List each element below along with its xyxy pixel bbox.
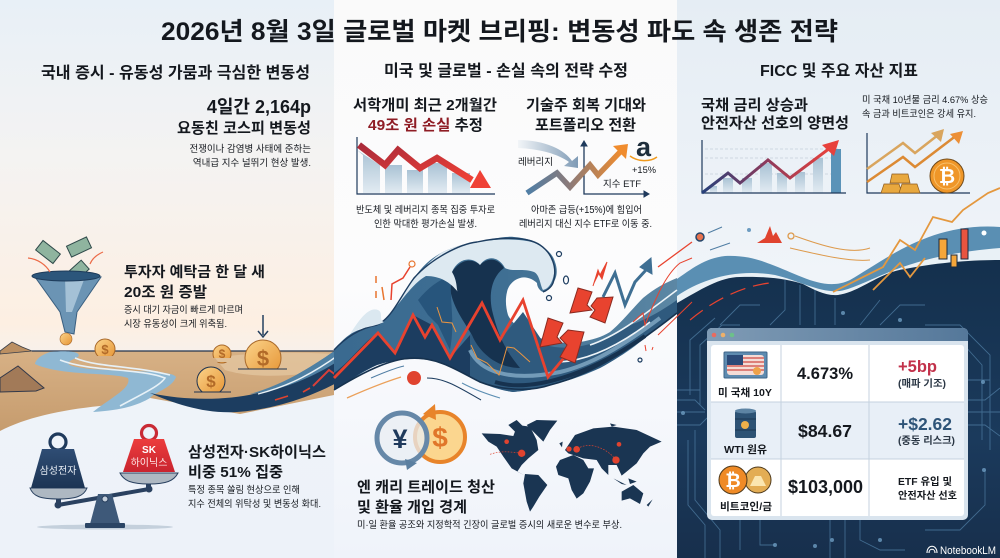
- text block: yen carry trade: 미·일 환율 공조와 지정학적 긴장이 글로벌 증시의 새로운 변수로 부상.: [357, 519, 622, 531]
- chart: falling losses: [357, 137, 495, 194]
- table row: WTI: +$2.62: [898, 414, 952, 434]
- wave navy lower left band: [334, 315, 470, 390]
- table row: WTI: (중동 리스크): [898, 435, 955, 447]
- line: red zigzag: [334, 300, 573, 378]
- line: orange rising: [833, 188, 1000, 292]
- text block: concentration: 삼성전자·SK하이닉스: [188, 444, 326, 461]
- text block: retail losses heading: [353, 97, 497, 134]
- wave dark core: [450, 260, 520, 368]
- illustration: market wave: [334, 237, 677, 392]
- chart: portfolio rotation: [518, 132, 657, 197]
- text block: KOSPI volatility: 전쟁이나 감염병 사태에 준하는: [189, 143, 311, 155]
- text block: rotation detail: 레버리지 대신 지수 ETF로 이동 중.: [519, 218, 652, 230]
- text block: bond heading: [701, 97, 849, 132]
- icon: broken red blocks: [540, 288, 613, 363]
- text block: KOSPI volatility: [177, 97, 311, 169]
- text block: deposits: 증시 대기 자금이 빠르게 마르며: [124, 305, 243, 316]
- table row: bitcoin gold: 안전자산 선호: [898, 489, 957, 502]
- panel: dashboard window: [707, 328, 968, 520]
- heading: global: 미국 및 글로벌 - 손실 속의 전략 수정: [384, 62, 628, 80]
- text block: yen carry trade: 엔 캐리 트레이드 청산: [357, 479, 495, 496]
- decorations: right wave accents: [690, 226, 986, 320]
- icon: amazon logo: a: [636, 132, 652, 162]
- icon: dollar coins: $: [101, 342, 109, 357]
- text block: yen carry trade: [357, 479, 622, 531]
- text block: bond heading: 국채 금리 상승과: [701, 97, 808, 114]
- label: plus 15 percent: +15%: [632, 165, 657, 176]
- text block: tech rotation heading: 기술주 회복 기대와: [526, 97, 646, 114]
- map: connecting routes: [490, 445, 616, 460]
- wave lower dark streak: [495, 336, 645, 385]
- wave lower right band: [470, 300, 677, 392]
- table row: US treasury: [718, 352, 946, 399]
- wave base: [334, 237, 677, 392]
- title: 2026년 8월 3일 글로벌 마켓 브리핑: 변동성 파도 속 생존 전략: [161, 18, 838, 46]
- map: world: [482, 420, 662, 512]
- text block: concentration: [188, 444, 326, 510]
- illustration: wave tail: [150, 347, 340, 412]
- text block: tech rotation heading: [526, 97, 646, 134]
- text block: concentration: 비중 51% 집중: [188, 464, 283, 481]
- table row: bitcoin gold: [719, 466, 957, 513]
- table row: bitcoin gold: 비트코인/금: [720, 500, 772, 513]
- table row: bitcoin gold: $103,000: [788, 477, 863, 497]
- heading: domestic: 국내 증시 - 유동성 가뭄과 극심한 변동성: [41, 64, 310, 82]
- table row: US treasury: (매파 기조): [898, 377, 946, 390]
- text block: yen carry trade: 및 환율 개입 경계: [357, 499, 467, 516]
- wave bottom line: [334, 313, 677, 390]
- icon: dollar coins: $: [206, 372, 216, 391]
- label: SK hynix weight: SK: [142, 445, 157, 456]
- line: orange volatility: [437, 307, 530, 375]
- icon: dollar coins: [95, 315, 287, 395]
- label: leverage: 레버리지: [518, 157, 553, 168]
- text block: KOSPI volatility: 역내급 지수 널뛰기 현상 발생.: [193, 158, 311, 169]
- icon: rising zigzag arrow: [593, 258, 652, 305]
- icon: oil barrel: [735, 408, 756, 438]
- text block: concentration: 지수 전체의 위탁성 및 변동성 화대.: [188, 498, 321, 510]
- wave crest line: [334, 238, 555, 350]
- label: index ETF: 지수 ETF: [603, 179, 641, 190]
- text block: losses detail: 반도체 및 레버리지 종목 집중 투자로: [356, 204, 495, 216]
- wave streak: [470, 318, 660, 376]
- chart: bond yields: [702, 140, 846, 193]
- table row: US treasury: 4.673%: [797, 365, 853, 383]
- table row: WTI: WTI 원유: [724, 443, 767, 456]
- icon: balance scale: [30, 426, 178, 530]
- panel: domestic market: [0, 64, 340, 530]
- text block: retail losses heading: 49조 원 손실 추정: [368, 117, 483, 134]
- icon: US flag certificate: [724, 352, 767, 378]
- icon: yen dollar exchange: [377, 404, 465, 470]
- table row: US treasury: +5bp: [898, 358, 937, 376]
- text block: bond detail: 미 국채 10년물 금리 4.67% 상승: [862, 95, 988, 106]
- left foam curl: [350, 309, 384, 334]
- text block: bond detail: [862, 95, 988, 120]
- text block: rotation detail: 아마존 급등(+15%)에 힘입어: [531, 203, 642, 216]
- icon: candlesticks: [939, 229, 968, 267]
- text block: deposits: [124, 264, 265, 330]
- wave white streak: [560, 290, 677, 362]
- icon: balance scale: 하이닉스: [131, 456, 167, 469]
- icon: bitcoin: ₿: [939, 166, 955, 188]
- icon: dollar coins: $: [219, 347, 226, 361]
- text block: bond heading: 안전자산 선호의 양면성: [701, 115, 849, 132]
- text block: losses detail: 인한 막대한 평가손실 발생.: [374, 218, 477, 230]
- wave accents: [347, 242, 692, 400]
- text block: tech rotation heading: 포트폴리오 전환: [535, 117, 636, 134]
- text block: bond detail: 속 금과 비트코인은 강세 유지.: [862, 109, 976, 120]
- text block: deposits: 시장 유동성이 크게 위축됨.: [124, 318, 227, 330]
- heading: FICC: FICC 및 주요 자산 지표: [760, 62, 918, 80]
- text block: concentration: 특정 종목 쏠림 현상으로 인해: [188, 484, 300, 496]
- icon: bills: [36, 237, 92, 284]
- illustration: dry land and river: [0, 342, 334, 431]
- icon: bitcoin coin: ₿: [725, 471, 741, 492]
- text block: deposits: 투자자 예탁금 한 달 새: [124, 264, 265, 281]
- chart: gold and bitcoin: [867, 129, 970, 193]
- wave mid shade: [418, 275, 452, 350]
- wave foam: [395, 240, 554, 308]
- label: Samsung weight: 삼성전자: [40, 465, 76, 477]
- icon: funnel with money: [28, 237, 103, 345]
- icon: gold bars: [881, 174, 920, 193]
- panel: FICC dark base: [677, 227, 1000, 558]
- text block: KOSPI volatility: 요동친 코스피 변동성: [177, 120, 311, 137]
- icon: dollar coins: $: [257, 346, 269, 371]
- table row: US treasury: 미 국채 10Y: [718, 386, 772, 399]
- decorative circuit traces: [677, 280, 1000, 558]
- icon: bitcoin coin: [719, 466, 747, 494]
- table row: WTI: [724, 408, 955, 456]
- table row: bitcoin gold: ETF 유입 및: [898, 475, 952, 488]
- icon: yen dollar exchange: ¥: [392, 424, 408, 454]
- text block: deposits: 20조 원 증발: [124, 284, 207, 301]
- decorative circuit nodes: [681, 311, 986, 548]
- map: location pins: [504, 439, 621, 464]
- text block: rotation detail: [519, 203, 652, 230]
- icon: yen dollar exchange: $: [432, 422, 448, 453]
- text block: KOSPI volatility: 4일간 2,164p: [207, 97, 311, 117]
- icon: gold coin: [745, 467, 771, 493]
- text block: losses detail: [356, 204, 495, 230]
- table row: WTI: $84.67: [798, 421, 852, 441]
- text block: retail losses heading: 서학개미 최근 2개월간: [353, 97, 497, 114]
